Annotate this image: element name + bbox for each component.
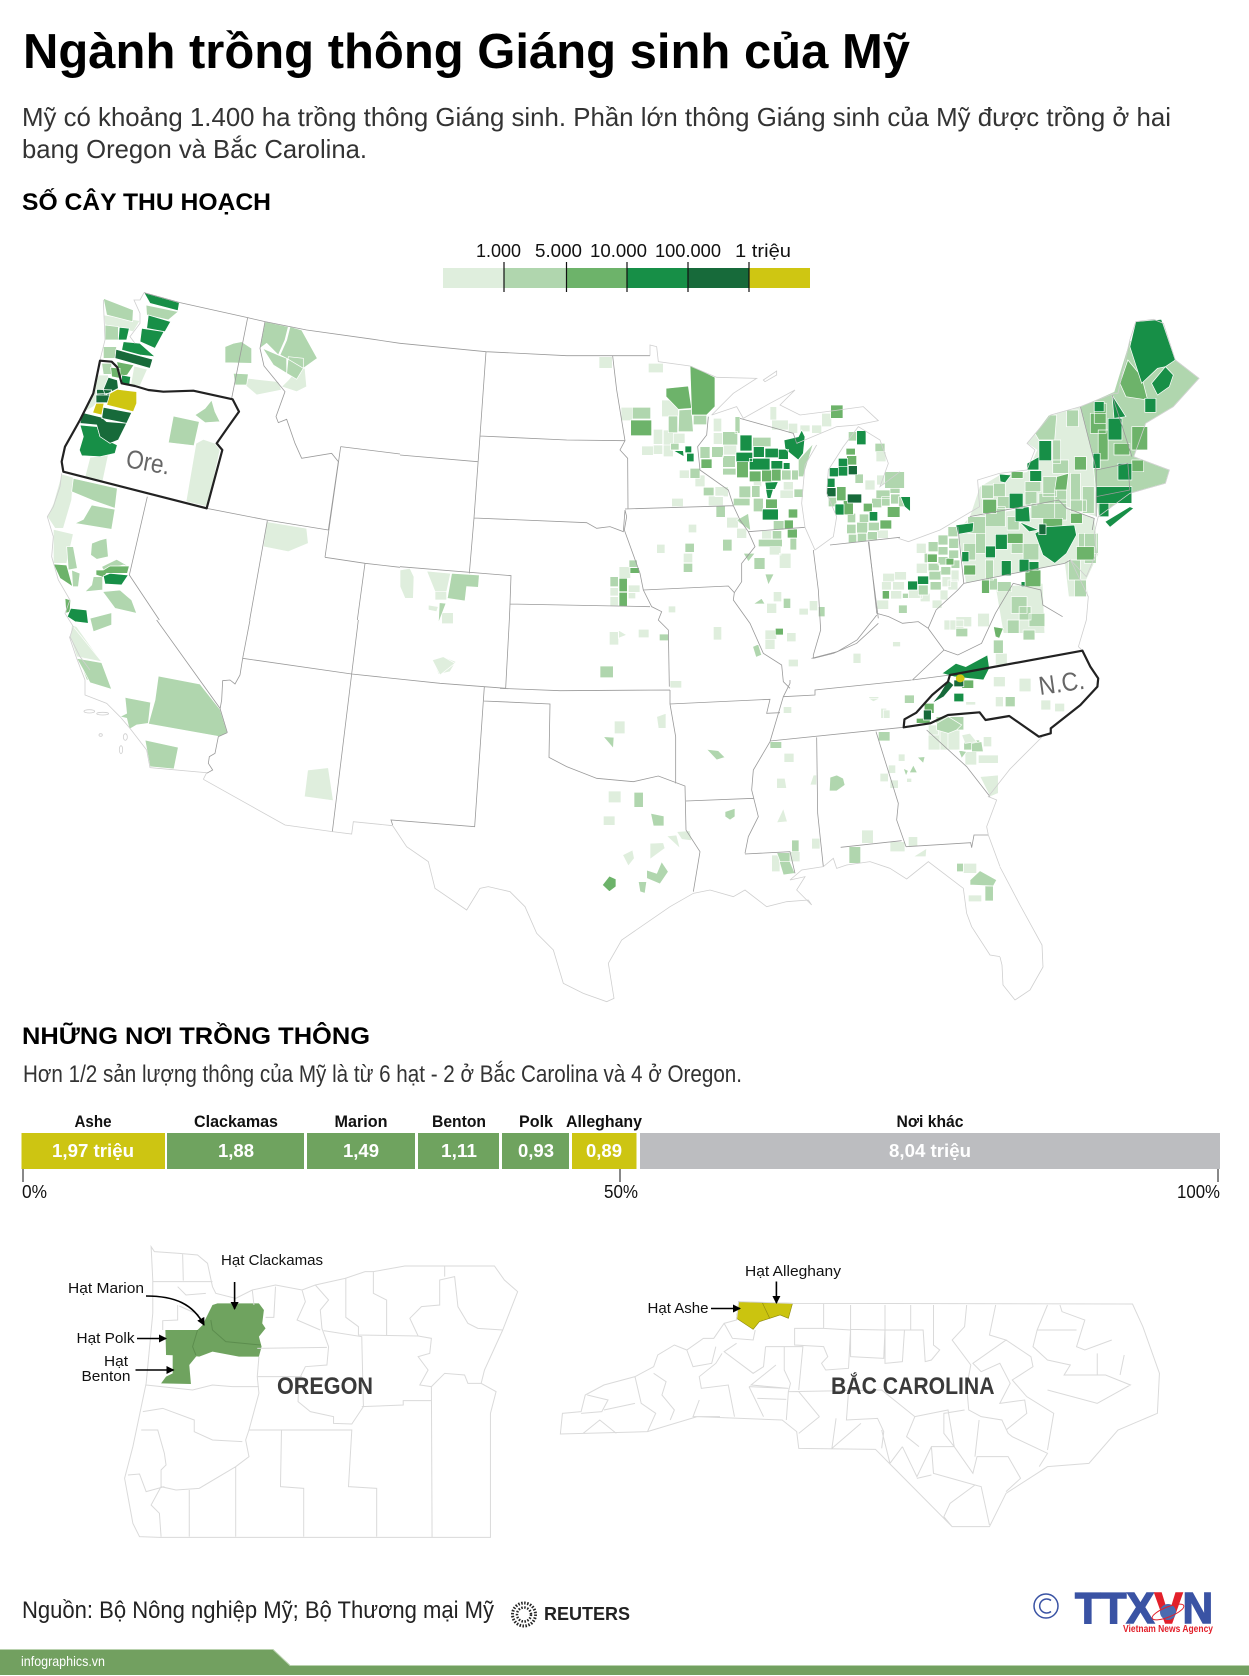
eastern county fills: [853, 319, 1199, 750]
stacked bar chart: 100%: [1177, 1182, 1220, 1202]
Oregon county map: Benton: [82, 1368, 130, 1385]
North Carolina county map: [560, 1263, 1159, 1527]
title: Ngành trồng thông Giáng sinh của Mỹ: [23, 25, 910, 79]
eastern coast: [899, 319, 1199, 651]
legend: [443, 241, 810, 292]
label: Ore.: Ore.: [124, 443, 172, 481]
map: US counties by harvested trees: [47, 293, 1199, 1002]
stacked bar chart: 0,89: [586, 1141, 622, 1161]
midwest county fills: [400, 357, 900, 688]
arrows to NC counties: [711, 1282, 776, 1308]
stacked bar chart: Alleghany: [566, 1112, 643, 1131]
intro text: [22, 102, 1171, 164]
heading: harvested trees: SỐ CÂY THU HOẠCH: [22, 188, 271, 216]
Oregon county map: OREGON: [277, 1373, 373, 1400]
south-west county fills: [70, 627, 456, 801]
source line: Nguồn: Bộ Nông nghiệp Mỹ; Bộ Thương mại Mỹ: [22, 1597, 494, 1624]
southern county fills: [602, 698, 998, 902]
footer band: [0, 1649, 1249, 1675]
stacked bar chart: 8,04 triệu: [889, 1141, 971, 1161]
south-west coast and Mexico border: [69, 637, 500, 910]
stacked bar chart: 50%: [604, 1182, 638, 1202]
southern borders: [500, 680, 990, 892]
west county fills: [47, 293, 317, 680]
TTXVN logo: TTXVN: [1075, 1584, 1213, 1633]
Oregon county map: Hạt: [104, 1353, 129, 1370]
legend: 1 triệu: [735, 241, 791, 261]
intro text: bang Oregon và Bắc Carolina.: [22, 134, 367, 164]
south-west borders: [157, 620, 509, 832]
eastern borders: [812, 395, 1132, 680]
North Carolina county map: Hạt Alleghany: [745, 1263, 842, 1280]
midwest borders: [400, 343, 900, 688]
stacked bar chart: [22, 1112, 1220, 1202]
Oregon county map: Hạt Clackamas: [221, 1252, 323, 1269]
florida and atlantic coast: [988, 737, 1043, 1000]
great lakes coast: [650, 345, 900, 550]
stacked bar chart: 1,49: [343, 1141, 379, 1161]
footer band: infographics.vn: [21, 1653, 105, 1669]
North Carolina county map: BẮC CAROLINA: [831, 1372, 994, 1400]
state borders: [129, 293, 400, 620]
highlighted NC counties: [737, 1302, 793, 1329]
stacked bar chart: Ashe: [74, 1112, 112, 1131]
legend: 5.000: [535, 241, 582, 261]
arrows to Oregon counties: [136, 1282, 235, 1370]
Oregon highlighted outline: [62, 361, 239, 508]
stacked bar chart: 1,97 triệu: [52, 1141, 134, 1161]
legend: 10.000: [590, 241, 647, 261]
heading: growing areas: NHỮNG NƠI TRỒNG THÔNG: [22, 1022, 370, 1050]
Oregon county map: Hạt Polk: [76, 1330, 135, 1347]
Reuters logo: [512, 1603, 630, 1626]
Reuters logo: REUTERS: [544, 1604, 630, 1624]
highlighted Oregon counties: [161, 1303, 266, 1384]
stacked bar chart: Marion: [334, 1112, 388, 1131]
Oregon county map: [68, 1247, 518, 1537]
legend: 100.000: [655, 241, 721, 261]
stacked bar chart: Clackamas: [194, 1112, 278, 1131]
southern coast: [500, 797, 1000, 1002]
North Carolina highlighted outline: [904, 651, 1098, 737]
stacked bar chart: Benton: [432, 1112, 486, 1131]
stacked bar chart: 0%: [22, 1182, 47, 1202]
stacked bar chart: Nơi khác: [896, 1112, 964, 1131]
coast lines west: [47, 293, 144, 670]
label: N.C.: N.C.: [1037, 665, 1086, 701]
North Carolina county map: Hạt Ashe: [648, 1300, 708, 1317]
stacked bar chart: 1,88: [218, 1141, 254, 1161]
stacked bar chart: 1,11: [441, 1141, 477, 1161]
Oregon county map: Hạt Marion: [68, 1280, 144, 1297]
intro text: Mỹ có khoảng 1.400 ha trồng thông Giáng sinh. Phần lớn thông Giáng sinh của Mỹ được trồng ở hai: [22, 102, 1171, 132]
TTXVN logo: Vietnam News Agency: [1123, 1623, 1213, 1635]
legend: 1.000: [476, 241, 521, 261]
sub-heading text: Hơn 1/2 sản lượng thông của Mỹ là từ 6 hạt - 2 ở Bắc Carolina và 4 ở Oregon.: [23, 1061, 742, 1088]
stacked bar chart: 0,93: [518, 1141, 554, 1161]
stacked bar chart: Polk: [519, 1112, 554, 1131]
